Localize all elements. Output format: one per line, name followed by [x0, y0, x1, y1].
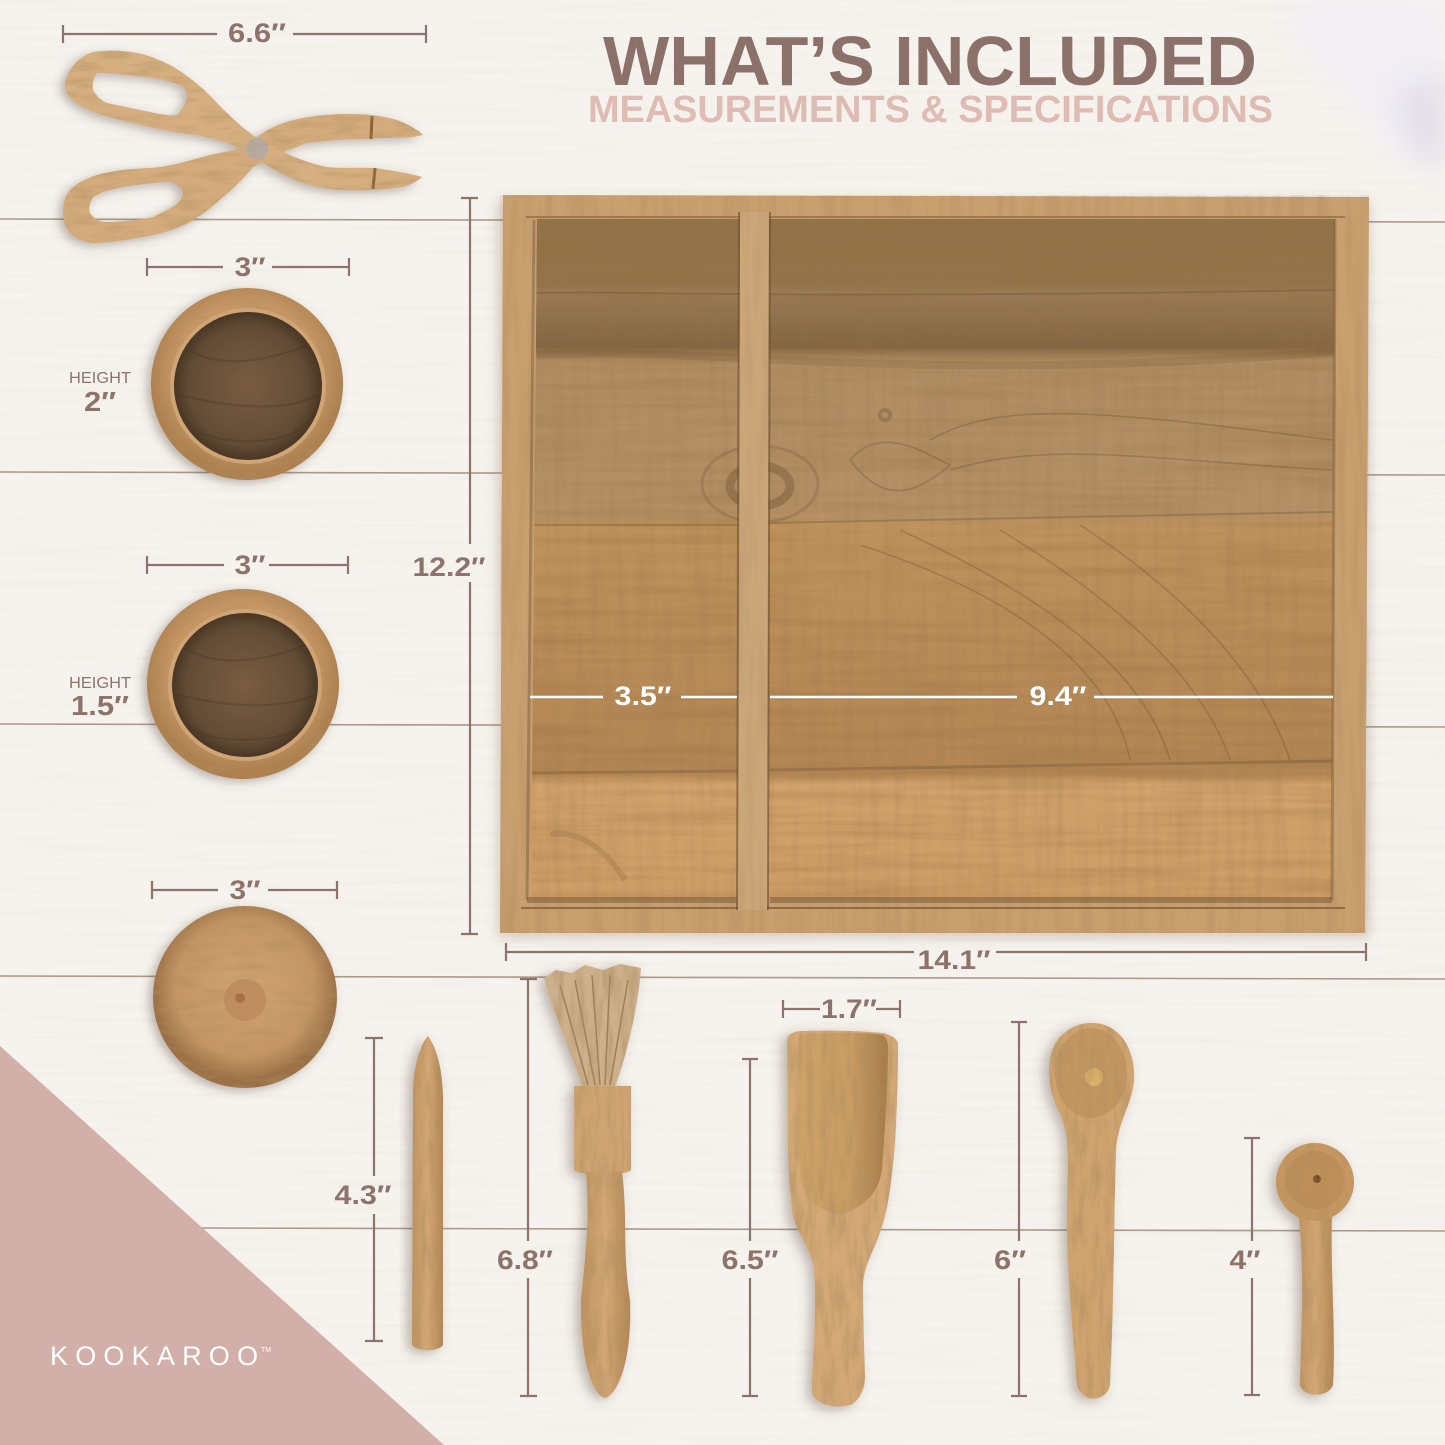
tong tip score lines [371, 116, 375, 189]
tray divider [738, 212, 769, 910]
tray height 12.2 in [412, 198, 486, 934]
tray width 14.1 in: 14.1″ [918, 945, 991, 975]
tray floor [525, 216, 1340, 905]
inner dimension 9.4 in: 9.4″ [1030, 681, 1087, 711]
bowl 1 height label: 2″ [84, 386, 116, 417]
icon: pestle [412, 1036, 443, 1350]
bowl 1 height label: HEIGHT [69, 370, 131, 387]
bowl 3 dimension 3 in: 3″ [230, 875, 261, 905]
bowl 1 dimension 3 in [147, 252, 349, 282]
pestle dimension 4.3 in: 4.3″ [334, 1180, 392, 1210]
bowl 2 height label: HEIGHT [69, 675, 131, 692]
handle [581, 1172, 630, 1398]
bowl 1 dimension 3 in: 3″ [234, 252, 266, 282]
spoon dimension 6 in [994, 1022, 1027, 1396]
bowl 2 dimension 3 in [147, 550, 348, 580]
scoop width 1.7 in [783, 994, 900, 1024]
bowl 2 dimension 3 in: 3″ [234, 550, 266, 580]
frame inner shadows [526, 216, 1345, 218]
pestle dimension 4.3 in [334, 1038, 392, 1341]
small spoon dimension 4 in [1230, 1138, 1261, 1395]
icon: brush [544, 964, 641, 1398]
icon: large spoon [1049, 1023, 1134, 1398]
icon: scoop [787, 1031, 898, 1406]
brand triangle: TM [261, 1347, 271, 1354]
subtitle: MEASUREMENTS & SPECIFICATIONS [588, 89, 1273, 131]
tray width 14.1 in [506, 943, 1366, 975]
icon: bowl 2 [147, 589, 339, 779]
spoon dimension 6 in: 6″ [994, 1245, 1026, 1275]
brush dimension 6.8 in [497, 979, 553, 1396]
bowl 2 height label: 1.5″ [71, 690, 129, 721]
brand name: KOOKAROO [50, 1341, 258, 1371]
title: WHAT’S INCLUDED [603, 22, 1257, 100]
bowl 1 height label [69, 370, 131, 417]
icon: small spoon [1276, 1143, 1354, 1395]
upper tong arm [65, 51, 422, 190]
scoop length 6.5 in: 6.5″ [722, 1245, 779, 1275]
icon: wooden tongs [63, 51, 423, 243]
spoon inlay dot [1085, 1068, 1103, 1086]
bristles [544, 964, 641, 1087]
bowl 2 height label [69, 675, 131, 721]
lower tong arm [63, 114, 423, 243]
tray shadow [497, 200, 1370, 938]
flower blur, top right [1285, 0, 1445, 180]
brush dimension 6.8 in: 6.8″ [497, 1245, 553, 1275]
tray outer frame [500, 195, 1369, 933]
small spoon dimension 4 in: 4″ [1230, 1245, 1261, 1275]
scoop hollow [798, 1033, 888, 1214]
icon: bowl 1 [151, 288, 343, 480]
tongs dimension 6.6 in [63, 18, 426, 48]
tong pivot [246, 138, 268, 160]
inner dimension 3.5 in: 3.5″ [614, 681, 672, 711]
scoop length 6.5 in [722, 1059, 779, 1396]
tongs dimension 6.6 in: 6.6″ [228, 18, 286, 48]
bowl 3 dimension 3 in [152, 875, 337, 905]
brand triangle [0, 1046, 444, 1445]
ferrule [574, 1086, 631, 1174]
icon: bowl 3 underside [153, 906, 337, 1088]
scoop width 1.7 in: 1.7″ [821, 994, 877, 1024]
wood grain marks [530, 290, 1335, 880]
tray [497, 195, 1370, 938]
tray height 12.2 in: 12.2″ [412, 552, 486, 582]
